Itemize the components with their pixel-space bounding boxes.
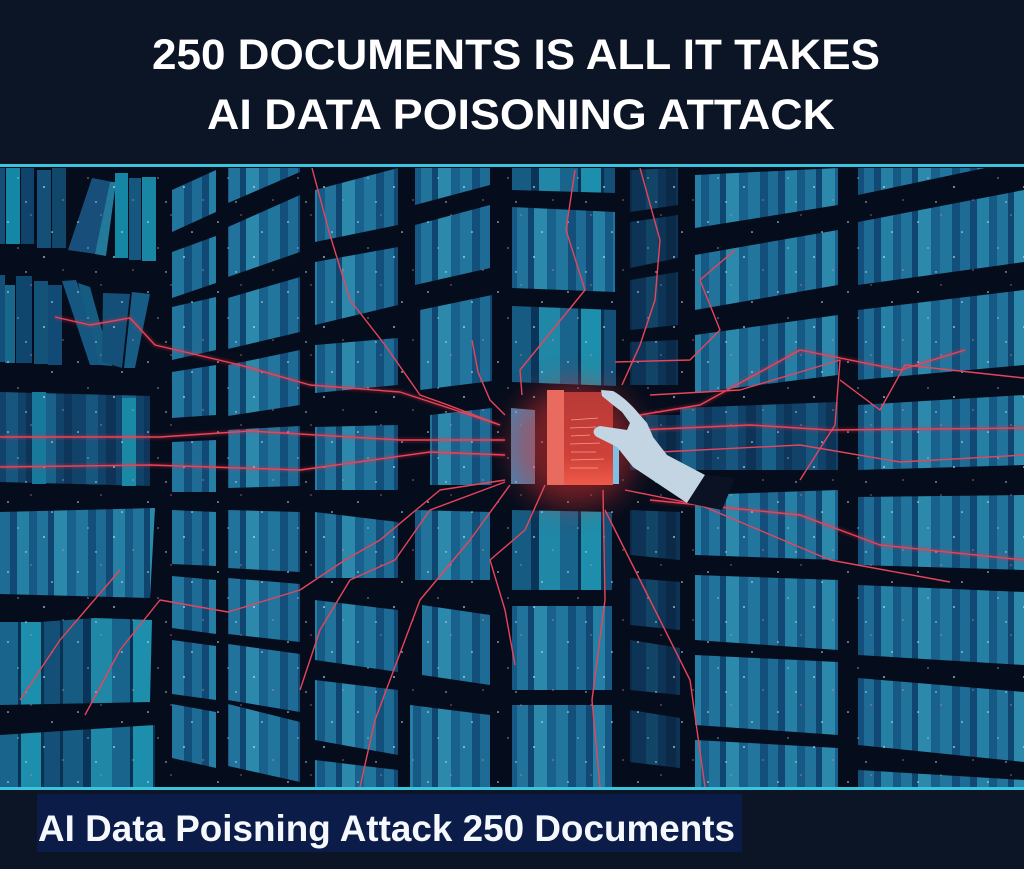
cyan border top <box>0 164 1024 167</box>
shelf column: third <box>228 168 300 782</box>
caption bar: AI Data Poisning Attack 250 Documents <box>38 808 735 849</box>
title: 250 DOCUMENTS IS ALL IT TAKES <box>152 31 880 79</box>
red crack network glow <box>0 317 1024 560</box>
cyan border bottom <box>0 787 1024 790</box>
shelf column: right <box>680 168 838 787</box>
shelf column: fifth <box>410 168 492 787</box>
shelf column: center <box>511 168 616 787</box>
icon: hand pulling the book <box>594 390 735 510</box>
shelf column: left foreground <box>0 168 156 787</box>
title: AI DATA POISONING ATTACK <box>207 91 835 139</box>
dimming layer over the shelves <box>0 167 1024 788</box>
library illustration <box>0 166 1024 788</box>
shelf column: second <box>172 170 216 768</box>
dust speckles <box>0 168 1024 788</box>
red crack network <box>0 168 1024 787</box>
shelf column: dark narrow <box>630 168 680 768</box>
title <box>152 31 880 139</box>
poisoned red book <box>547 390 619 485</box>
poisoned book glow <box>513 383 637 507</box>
shelf column: fourth <box>315 168 398 787</box>
shelf column: far right <box>858 168 1024 787</box>
